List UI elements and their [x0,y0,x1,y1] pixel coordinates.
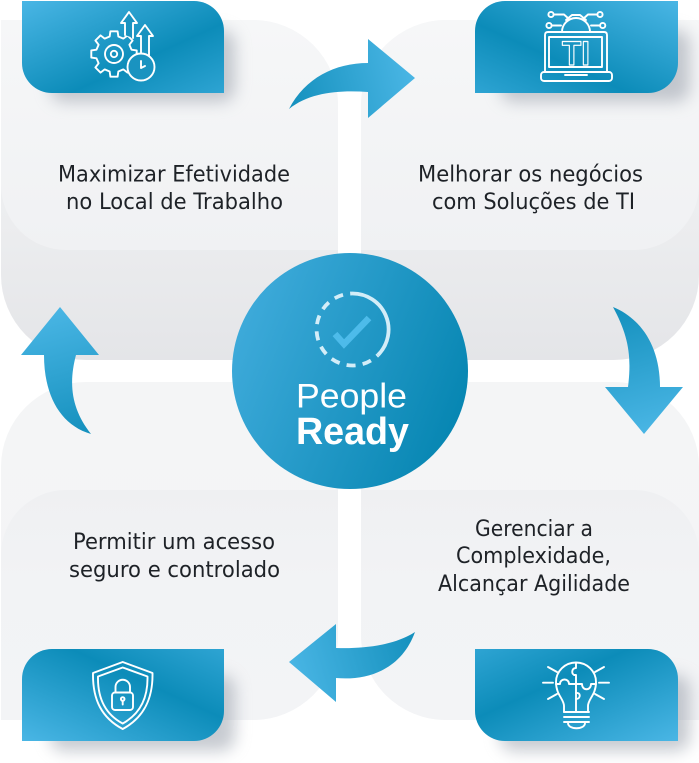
icon: dashed ring with check [317,293,389,365]
tab: top right with laptop icon [475,1,690,102]
icon: laptop TI: TI [562,35,590,73]
icon: gear, clock and arrows [91,12,154,80]
text: top left: Maximizar Efetividade [58,162,290,188]
center circle: People Ready [232,253,468,489]
panel: bottom right [361,382,699,720]
text: bottom left: Permitir um acesso [73,529,275,555]
icon: puzzle light bulb [543,662,609,728]
text: top left [58,162,290,215]
text: top right: Melhorar os negócios [418,162,643,188]
panel: bottom left [1,382,338,720]
text: bottom right [438,516,630,597]
label: Ready: Ready [296,411,409,453]
tab: top left with gear icon [22,1,235,102]
tab: bottom left with shield icon [22,649,235,751]
text: bottom right: Complexidade, [456,543,611,569]
text: bottom right: Alcançar Agilidade [438,571,630,597]
text: bottom left: seguro e controlado [69,557,280,583]
icon: laptop TI [541,12,612,81]
arrow: top [289,39,415,118]
tab: bottom right with light bulb icon [475,649,690,751]
text: bottom left [69,529,280,583]
icon: shield and padlock [93,662,153,729]
panel: top left [1,20,338,360]
text: top right [418,162,643,215]
text: top left: no Local de Trabalho [66,189,283,215]
label: People: People [296,378,407,416]
text: top right: com Soluções de TI [432,189,635,215]
text: bottom right: Gerenciar a [475,516,593,542]
arrow: right [605,307,683,434]
arrow: left [21,307,99,434]
panel: top right [361,20,699,360]
arrow: bottom [289,624,415,702]
